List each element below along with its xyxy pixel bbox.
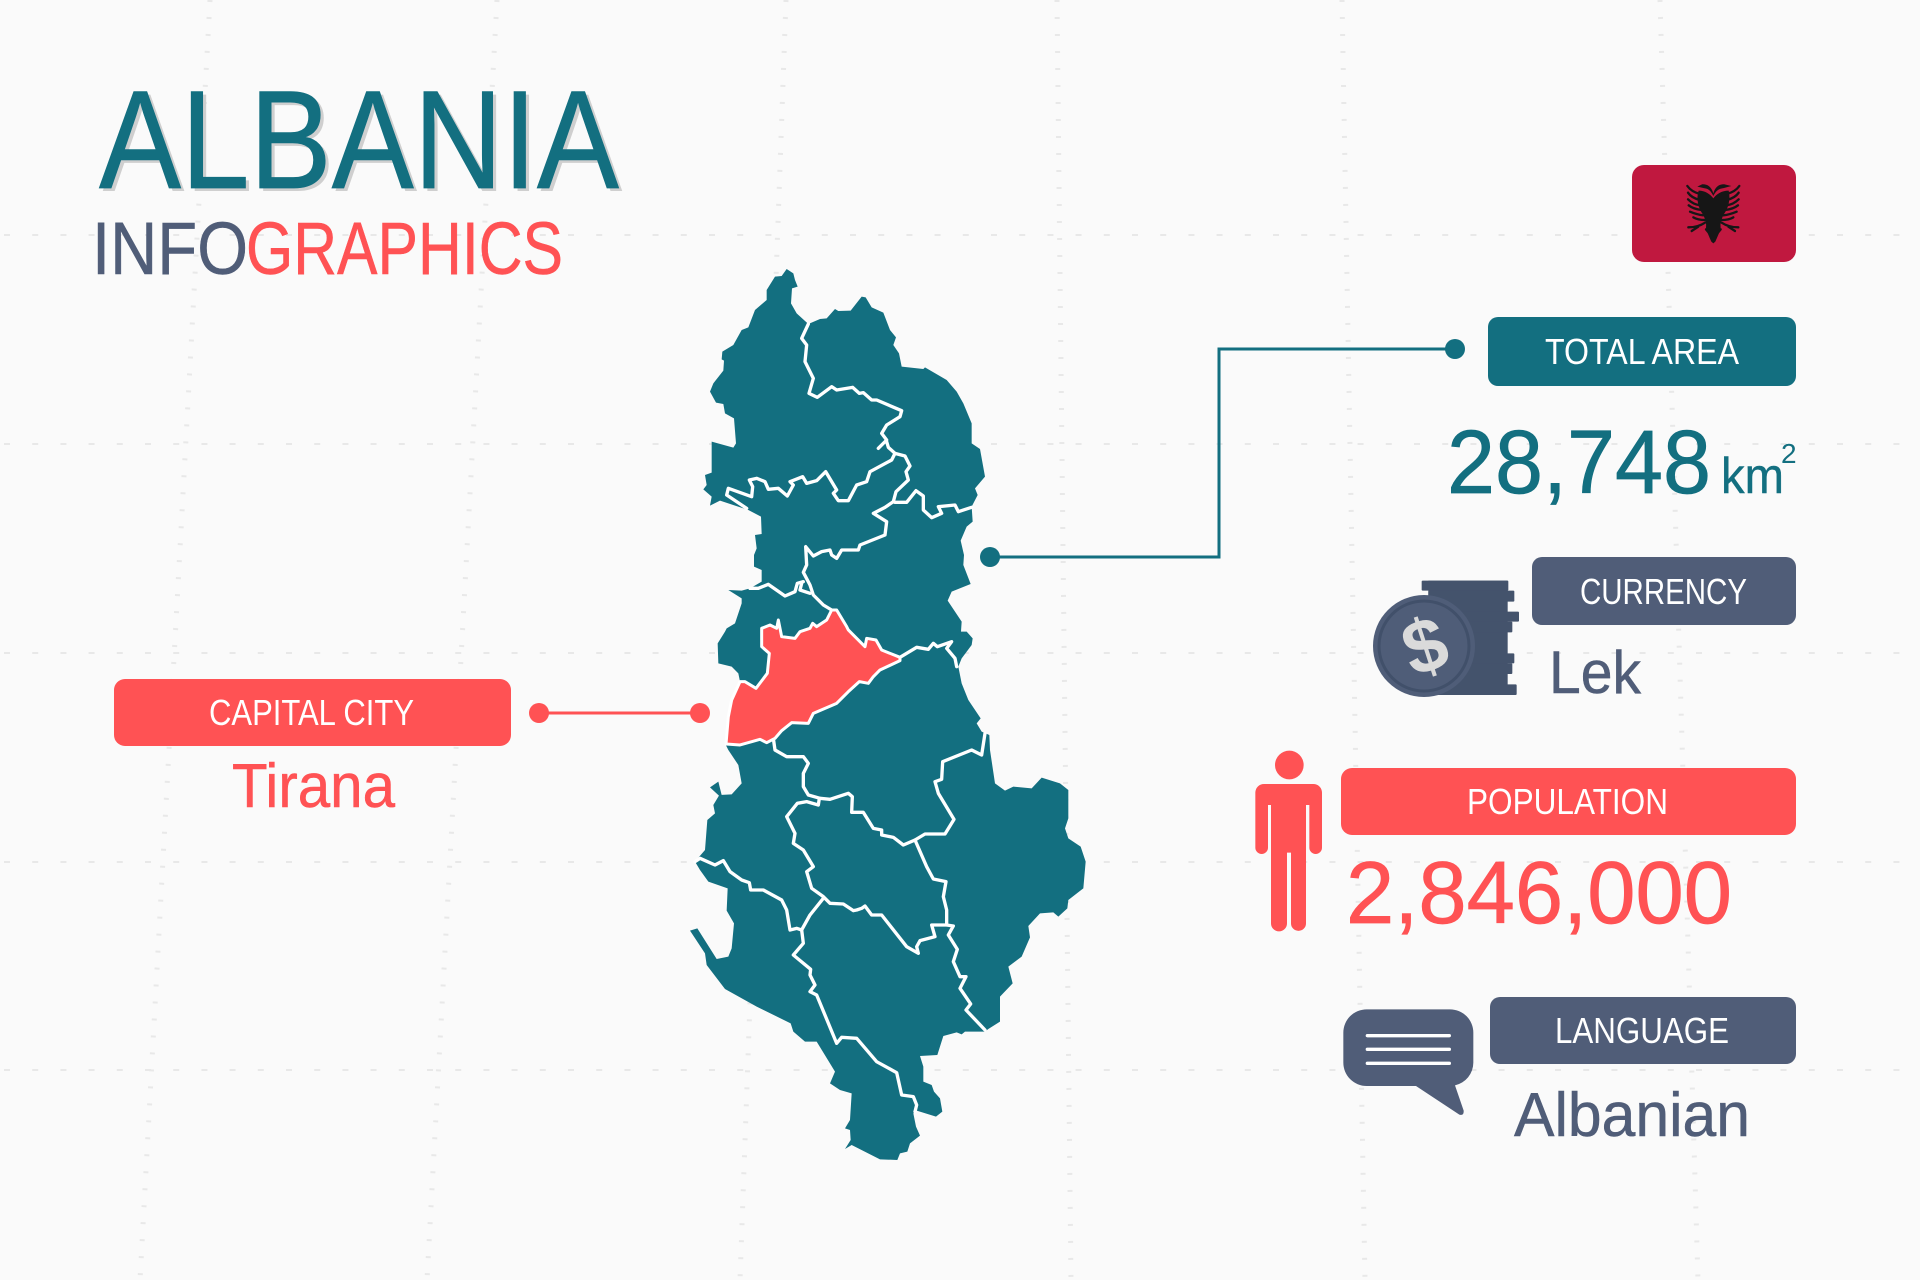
map silhouette: south — [690, 700, 1086, 1160]
subtitle: INFO: INFO — [92, 207, 248, 290]
map silhouette: north — [703, 269, 985, 702]
population badge — [1341, 768, 1796, 835]
language badge — [1490, 997, 1796, 1064]
population value: 2,846,000 — [1346, 843, 1732, 942]
connector: map to total area — [980, 339, 1465, 567]
total area badge — [1488, 317, 1796, 386]
language value: Albanian — [1514, 1081, 1750, 1150]
title — [92, 61, 623, 290]
currency value: Lek — [1549, 639, 1642, 706]
currency badge — [1532, 557, 1796, 625]
region borders: north — [727, 324, 972, 667]
language label: LANGUAGE — [1555, 1010, 1729, 1051]
total area unit exponent: 2 — [1781, 438, 1797, 469]
panel: total area — [1447, 317, 1797, 513]
icon: double-headed eagle — [1687, 184, 1739, 243]
map of Albania — [690, 269, 1086, 1160]
icon: person — [1255, 751, 1322, 931]
capital city label: CAPITAL CITY — [209, 692, 414, 733]
flag of Albania — [1632, 165, 1796, 262]
currency label: CURRENCY — [1580, 571, 1747, 612]
panel: capital city — [114, 679, 511, 821]
title shadow: ALBANIA: ALBANIA — [102, 64, 623, 221]
panel: currency — [1373, 557, 1796, 706]
icon: coin stack: $ — [1392, 600, 1458, 693]
capital name: Tirana — [232, 752, 395, 821]
region highlighted: Tirana — [726, 610, 900, 745]
population label: POPULATION — [1467, 781, 1668, 822]
total area value: 28,748 — [1447, 413, 1711, 513]
region borders: south — [695, 733, 985, 1112]
total area unit: km — [1721, 448, 1784, 504]
panel: population — [1255, 751, 1796, 942]
capital city badge — [114, 679, 511, 746]
icon: speech bubble — [1343, 1009, 1473, 1115]
icon: coin stack — [1373, 581, 1519, 697]
total area label: TOTAL AREA — [1545, 331, 1739, 372]
subtitle: GRAPHICS: GRAPHICS — [246, 207, 563, 290]
panel: language — [1343, 997, 1796, 1150]
connector: capital city to map — [529, 703, 710, 723]
title: ALBANIA: ALBANIA — [99, 61, 620, 218]
